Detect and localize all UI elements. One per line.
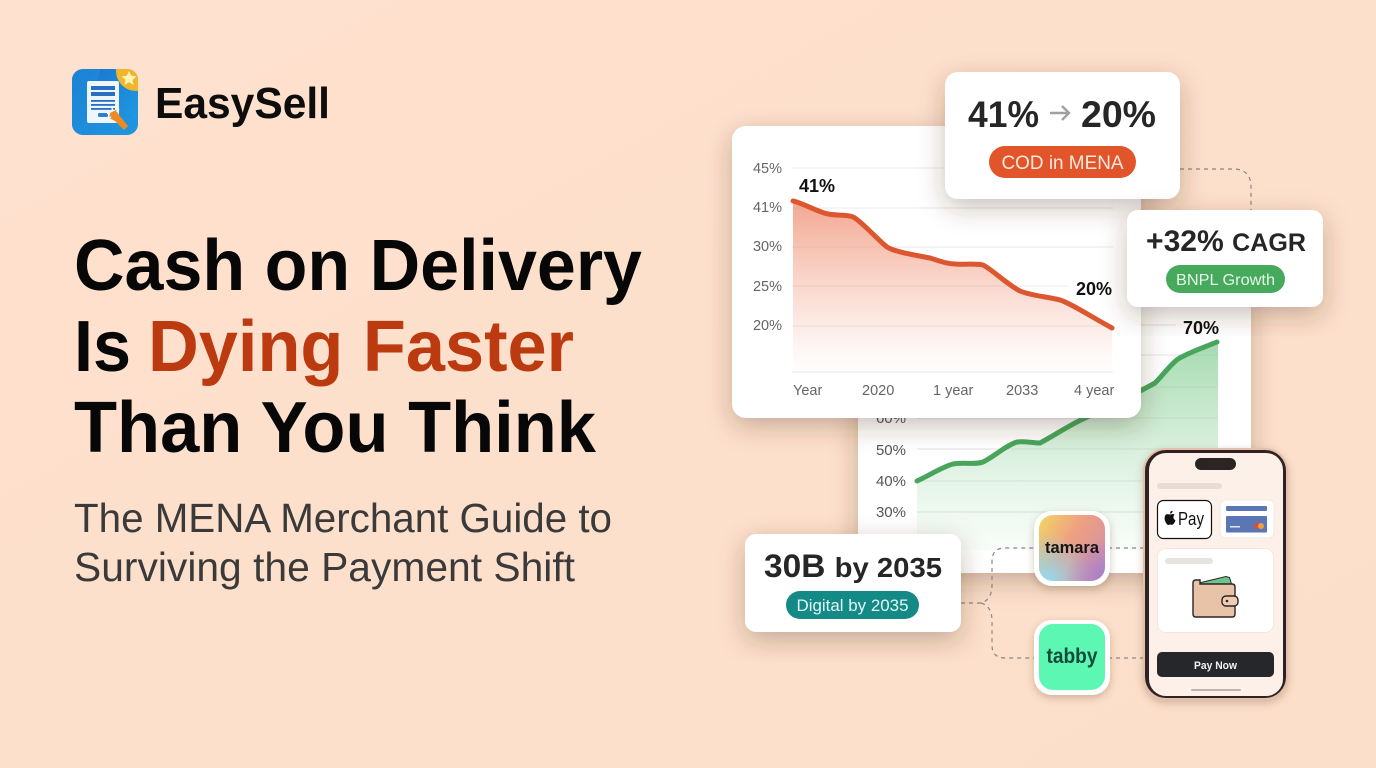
y axis labels: 20% (753, 318, 782, 334)
panel: COD decline chart (732, 126, 1141, 418)
icon: tabby (1034, 620, 1110, 695)
icon: wallet (1193, 576, 1238, 617)
y axis labels: 60% (876, 410, 906, 427)
y axis labels: 41% (753, 200, 782, 216)
start label: 41% (799, 176, 835, 196)
headline: Is (74, 307, 131, 387)
callout: COD in MENA (945, 72, 1180, 199)
apple pay button (1158, 500, 1212, 538)
apple pay button: Pay (1178, 509, 1204, 529)
y axis labels: 40% (876, 473, 906, 490)
subtitle (74, 495, 612, 590)
phone mockup (1144, 449, 1287, 699)
brand name: EasySell (155, 79, 330, 128)
x axis labels: 4 year (1074, 383, 1114, 399)
dashed connectors: digital to providers (961, 548, 1144, 658)
headline: Than You Think (74, 388, 597, 468)
callout: BNPL CAGR: +32% CAGR (1146, 225, 1306, 258)
arrow (1050, 106, 1069, 120)
callout: 30B by 2035 (745, 534, 961, 632)
headline (74, 226, 642, 468)
y axis labels: 30% (876, 504, 906, 521)
green area and line (917, 342, 1218, 550)
subtitle: Surviving the Payment Shift (74, 544, 576, 590)
callout: BNPL CAGR (1127, 210, 1323, 307)
icon: tabby: tabby (1046, 645, 1098, 668)
notch (1195, 458, 1236, 470)
y axis labels: 45% (753, 161, 782, 177)
callout: BNPL CAGR: BNPL Growth (1176, 272, 1275, 289)
y axis labels: 50% (876, 442, 906, 459)
x axis labels (793, 383, 1114, 399)
y axis labels: 25% (753, 279, 782, 295)
card option (1220, 500, 1274, 538)
subtitle: The MENA Merchant Guide to (74, 495, 612, 541)
icon: tamara (1034, 511, 1110, 586)
x axis labels: Year (793, 383, 822, 399)
x axis labels: 2033 (1006, 383, 1038, 399)
logo icon (72, 69, 138, 135)
callout: 30B by 2035: Digital by 2035 (796, 597, 908, 615)
callout: 30B by 2035: 30B by 2035 (764, 548, 942, 584)
x axis labels: 2020 (862, 383, 894, 399)
pay now button (1157, 652, 1274, 677)
y axis labels (753, 161, 782, 334)
icon: tamara: tamara (1045, 538, 1100, 557)
y axis labels (876, 410, 906, 521)
dashed connector: COD to BNPL (1180, 169, 1251, 210)
headline: Cash on Delivery (74, 226, 642, 306)
y axis labels: 30% (753, 239, 782, 255)
x axis labels: 1 year (933, 383, 973, 399)
callout: COD in MENA: COD in MENA (1002, 153, 1124, 174)
headline: Dying Faster (148, 307, 574, 387)
end label: 70% (1183, 318, 1219, 338)
pay now button: Pay Now (1194, 660, 1237, 672)
pill (786, 591, 919, 619)
pill (989, 146, 1136, 178)
panel: BNPL growth chart (858, 290, 1251, 573)
pill (1166, 265, 1285, 293)
callout: COD in MENA: 41% (968, 94, 1039, 135)
end label: 20% (1076, 279, 1112, 299)
callout: COD in MENA: 20% (1081, 94, 1156, 135)
orange area and line (793, 201, 1112, 372)
wallet card (1158, 548, 1274, 632)
